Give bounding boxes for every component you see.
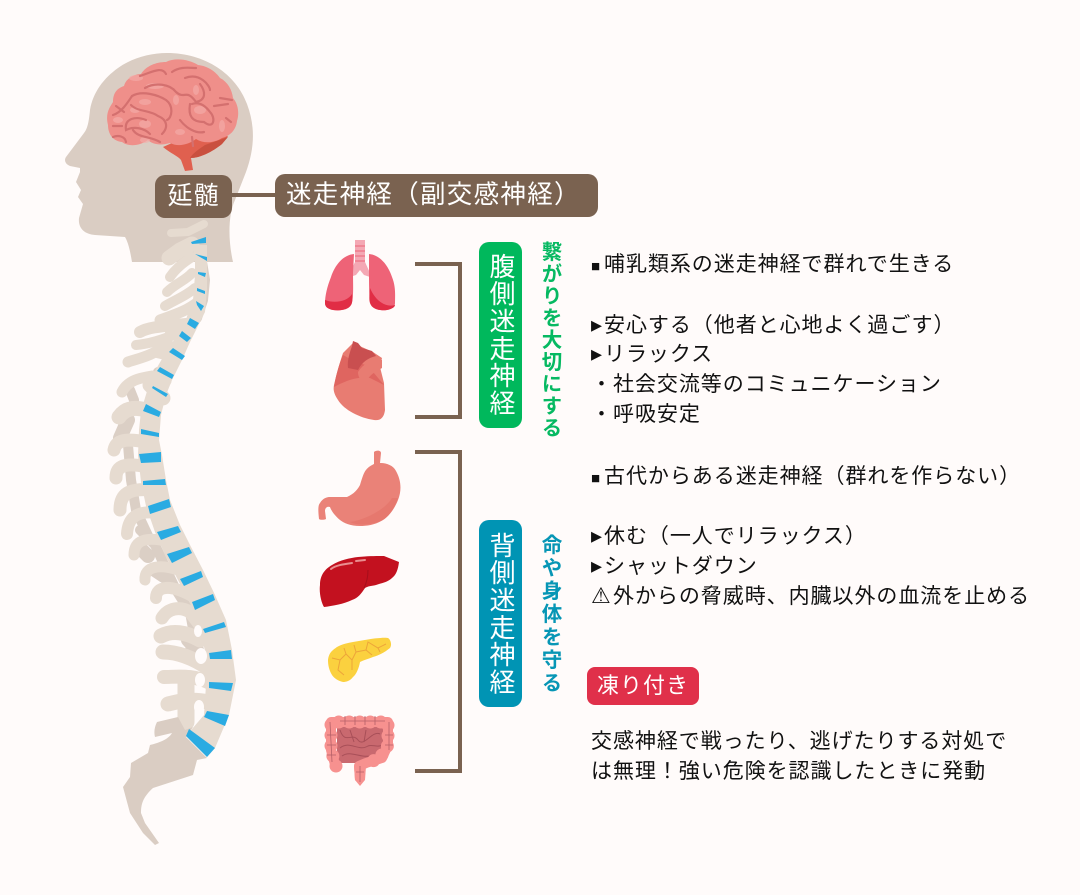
text: dorsal warning: 外からの脅威時、内臓以外の血流を止める: [613, 585, 1030, 608]
text: freezing description: [591, 730, 1007, 783]
caption: dorsal: 命や身体を守る: [538, 534, 561, 695]
text: ventral heading: ■: [591, 258, 600, 275]
text: ventral item 3: ・: [591, 373, 612, 396]
label: dorsal vagus: [479, 520, 522, 707]
text: dorsal item 1: ▸: [591, 523, 602, 548]
label: medulla: 延髄: [167, 182, 220, 210]
text: dorsal warning: ⚠: [591, 584, 611, 609]
badge: freezing: [587, 667, 699, 705]
text: ventral item 4: 呼吸安定: [613, 403, 701, 426]
icon: intestines: [327, 716, 393, 786]
text: dorsal item 1: 休む（一人でリラックス）: [604, 525, 867, 548]
text: freezing description: 交感神経で戦ったり、逃げたりする対処で: [591, 730, 1007, 753]
text: dorsal item 2: ▸: [591, 553, 602, 578]
head silhouette: [65, 53, 253, 262]
icon: heart: [334, 341, 385, 420]
text: dorsal heading: ■: [591, 470, 600, 487]
text: ventral item 3: 社会交流等のコミュニケーション: [613, 373, 942, 396]
text: dorsal item 2: シャットダウン: [604, 555, 758, 578]
icon: liver: [320, 556, 399, 607]
label: medulla: [155, 175, 232, 218]
text: ventral item 4: ・: [591, 403, 612, 426]
label: ventral vagus: [479, 242, 522, 428]
label: dorsal vagus: 背側迷走神経: [486, 532, 516, 695]
text: ventral item 1: ▸: [591, 312, 602, 337]
vertebral processes: [114, 224, 212, 722]
connector line: [232, 193, 276, 197]
bracket: ventral: [415, 264, 460, 417]
text: freezing description: は無理！強い危険を認識したときに発動: [591, 760, 986, 783]
text: ventral item 1: 安心する（他者と心地よく過ごす）: [604, 314, 955, 337]
text: dorsal heading: 古代からある迷走神経（群れを作らない）: [604, 465, 1021, 488]
intervertebral discs: [139, 237, 233, 757]
bracket: dorsal: [415, 452, 460, 771]
back column shadow: [118, 262, 205, 650]
text: ventral item 2: ▸: [591, 341, 602, 366]
icon: pancreas: [328, 638, 391, 682]
label: ventral vagus: 腹側迷走神経: [486, 253, 516, 417]
icon: stomach: [318, 451, 400, 526]
label: vagus nerve: [275, 174, 598, 217]
spine: [114, 224, 236, 845]
text: ventral heading: 哺乳類系の迷走神経で群れで生きる: [604, 253, 954, 276]
vertebral bodies: [138, 245, 236, 757]
icon: lungs: [325, 240, 395, 310]
label: vagus nerve: 迷走神経（副交感神経）: [286, 181, 581, 209]
brain: [107, 59, 238, 171]
foramina gaps: [194, 625, 207, 714]
caption: ventral: 繋がりを大切にする: [538, 241, 561, 439]
badge: freezing: 凍り付き: [597, 673, 689, 698]
text: ventral item 2: リラックス: [604, 343, 713, 366]
sacrum: [123, 717, 207, 845]
